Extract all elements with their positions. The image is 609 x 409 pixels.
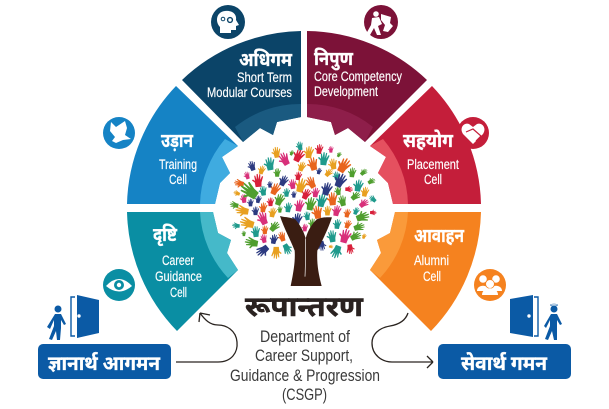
segment: Adhigam: अधिगम (239, 49, 293, 74)
department description: Career Support, (255, 347, 353, 365)
segment: Drishti: Career (162, 253, 194, 268)
exit person and door (510, 295, 562, 340)
icon: handshake heart (457, 117, 489, 149)
icon: people (474, 269, 506, 301)
segment: Nipun (307, 31, 427, 142)
department description (230, 328, 380, 404)
entry label: ज्ञानार्थ आगमन (48, 352, 161, 379)
segment: Drishti: Cell (170, 285, 187, 300)
segment: Drishti: Guidance (155, 269, 202, 284)
icon: eye (103, 269, 135, 301)
segment: Aavahan (370, 212, 481, 331)
segment: Sahyog (370, 86, 481, 204)
icon: head with gears (211, 5, 245, 39)
department description: (CSGP) (282, 386, 327, 404)
segment: Udaan: Cell (169, 172, 187, 187)
segment: Udaan: उड़ान (161, 130, 193, 155)
segment: Adhigam: Short Term (237, 70, 292, 85)
segment: Drishti (127, 212, 238, 331)
segment: Aavahan: आवाहन (414, 225, 464, 250)
icon: worker (364, 5, 398, 39)
segment: Aavahan: Cell (423, 269, 441, 284)
segment: Adhigam (182, 31, 301, 142)
segment: Nipun: Development (314, 84, 378, 99)
exit label (438, 344, 571, 379)
segment: Drishti: दृष्टि (153, 224, 178, 249)
tree of hands (229, 141, 378, 286)
icon: dove (103, 117, 135, 149)
segment: Aavahan: Alumni (414, 253, 449, 268)
segment: Udaan (127, 86, 238, 204)
segment: Sahyog: Placement (407, 157, 459, 172)
segment: Sahyog: सहयोग (403, 130, 454, 155)
entry label (38, 344, 171, 379)
segment: Udaan: Training (159, 157, 197, 172)
arrow: entry to Drishti (176, 313, 237, 362)
arrow: Aavahan to exit (372, 313, 433, 368)
department description: Department of (260, 328, 350, 346)
exit label: सेवार्थ गमन (461, 351, 548, 379)
title: रूपान्तरण (245, 292, 364, 328)
department description: Guidance & Progression (230, 367, 380, 385)
entry person and door (47, 295, 99, 340)
segment: Nipun: निपुण (314, 48, 354, 73)
segment: Sahyog: Cell (424, 172, 442, 187)
segment: Adhigam: Modular Courses (207, 85, 292, 100)
segment: Nipun: Core Competency (314, 69, 402, 84)
